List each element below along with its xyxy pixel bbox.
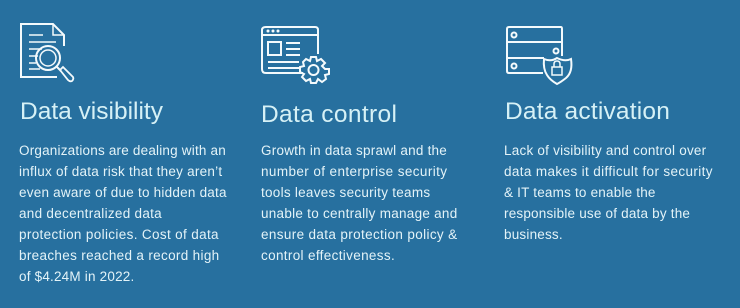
- text: Data visibility description: influx of data risk that they aren’t: [19, 164, 222, 179]
- text: Data control description: number of enterprise security: [261, 164, 447, 179]
- heading: Data activation: Data activation: [505, 98, 670, 125]
- text: Data visibility description: protection policies. Cost of data: [19, 227, 219, 242]
- heading: Data visibility: Data visibility: [20, 98, 163, 125]
- text: Data visibility description: [19, 143, 227, 284]
- text: Data control description: Growth in data sprawl and the: [261, 143, 447, 158]
- text: Data activation description: [504, 143, 713, 242]
- text: Data control description: unable to centrally manage and: [261, 206, 457, 221]
- text: Data control description: tools leaves security teams: [261, 185, 430, 200]
- text: Data activation description: & IT teams to enable the: [504, 185, 656, 200]
- text: Data visibility description: of $4.24M in 2022.: [19, 269, 134, 284]
- text: Data activation description: business.: [504, 227, 563, 242]
- text: Data activation description: Lack of visibility and control over: [504, 143, 706, 158]
- text: Data visibility description: and decentralized data: [19, 206, 162, 221]
- text: Data control description: [261, 143, 458, 263]
- text: Data activation description: data makes it difficult for security: [504, 164, 713, 179]
- text: Data visibility description: even aware of due to hidden data: [19, 185, 227, 200]
- text: Data control description: control effectiveness.: [261, 248, 395, 263]
- heading: Data control: Data control: [261, 101, 397, 128]
- text: Data activation description: responsible use of data by the: [504, 206, 690, 221]
- text: Data control description: ensure data protection policy &: [261, 227, 458, 242]
- text: Data visibility description: Organizations are dealing with an: [19, 143, 226, 158]
- text: Data visibility description: breaches reached a record high: [19, 248, 220, 263]
